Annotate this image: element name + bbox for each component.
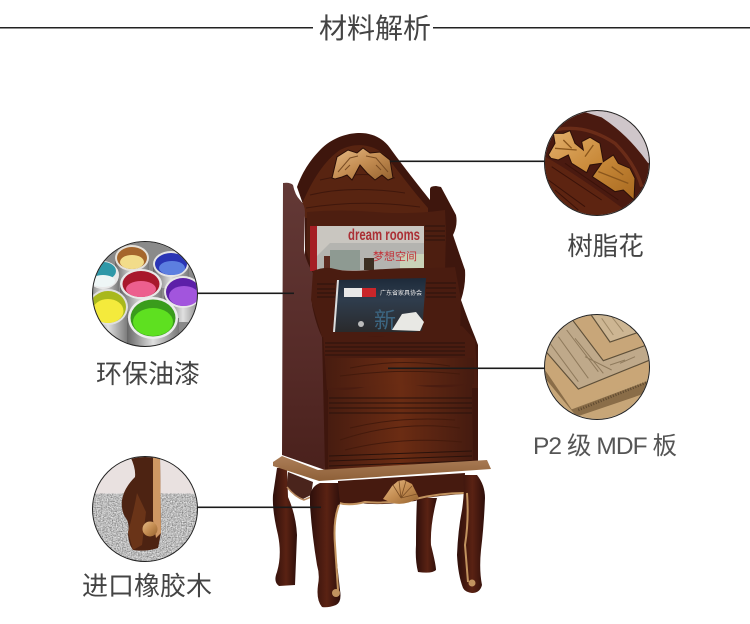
third shelf (323, 326, 478, 390)
top shelf (306, 210, 446, 272)
label: P2 级 MDF 板: P2 级 MDF 板 (533, 432, 677, 460)
front right leg (457, 475, 485, 593)
label: 树脂花: 树脂花 (567, 233, 644, 261)
arched back and right silhouette (297, 133, 478, 470)
leader line: eco paint (197, 292, 294, 294)
front panel (328, 382, 473, 470)
leader line: MDF board (388, 368, 545, 369)
leader line: resin flower (390, 160, 545, 162)
label: 环保油漆: 环保油漆 (96, 359, 200, 389)
left apron (287, 472, 313, 499)
magazine: dream rooms: 梦想空间 (373, 249, 417, 263)
gold shell carving (383, 480, 419, 504)
icon: MDF board detail (544, 314, 650, 420)
gold crest carving (332, 148, 393, 180)
icon: resin flower detail (544, 110, 650, 216)
leader line: rubberwood (197, 506, 321, 508)
back left leg (273, 468, 297, 586)
magazine: dream rooms (310, 226, 424, 271)
icon: paint cans detail (92, 241, 198, 347)
front apron (338, 473, 465, 505)
gold plinth (273, 456, 491, 481)
second shelf (311, 267, 461, 337)
magazine: black cover (333, 278, 426, 333)
back right leg (416, 498, 437, 573)
heading: 材料解析 with rules: 材料解析 (319, 13, 431, 44)
magazine: dream rooms: dream rooms (348, 227, 420, 244)
magazine: black cover: 新 (374, 308, 396, 333)
icon: carved leg detail (90, 455, 200, 562)
furniture: wooden magazine rack (273, 133, 491, 607)
magazine: black cover: 广东省家具协会 (380, 289, 422, 297)
front left leg (310, 483, 340, 607)
label: 进口橡胶木: 进口橡胶木 (82, 571, 212, 601)
side panel (282, 183, 325, 470)
